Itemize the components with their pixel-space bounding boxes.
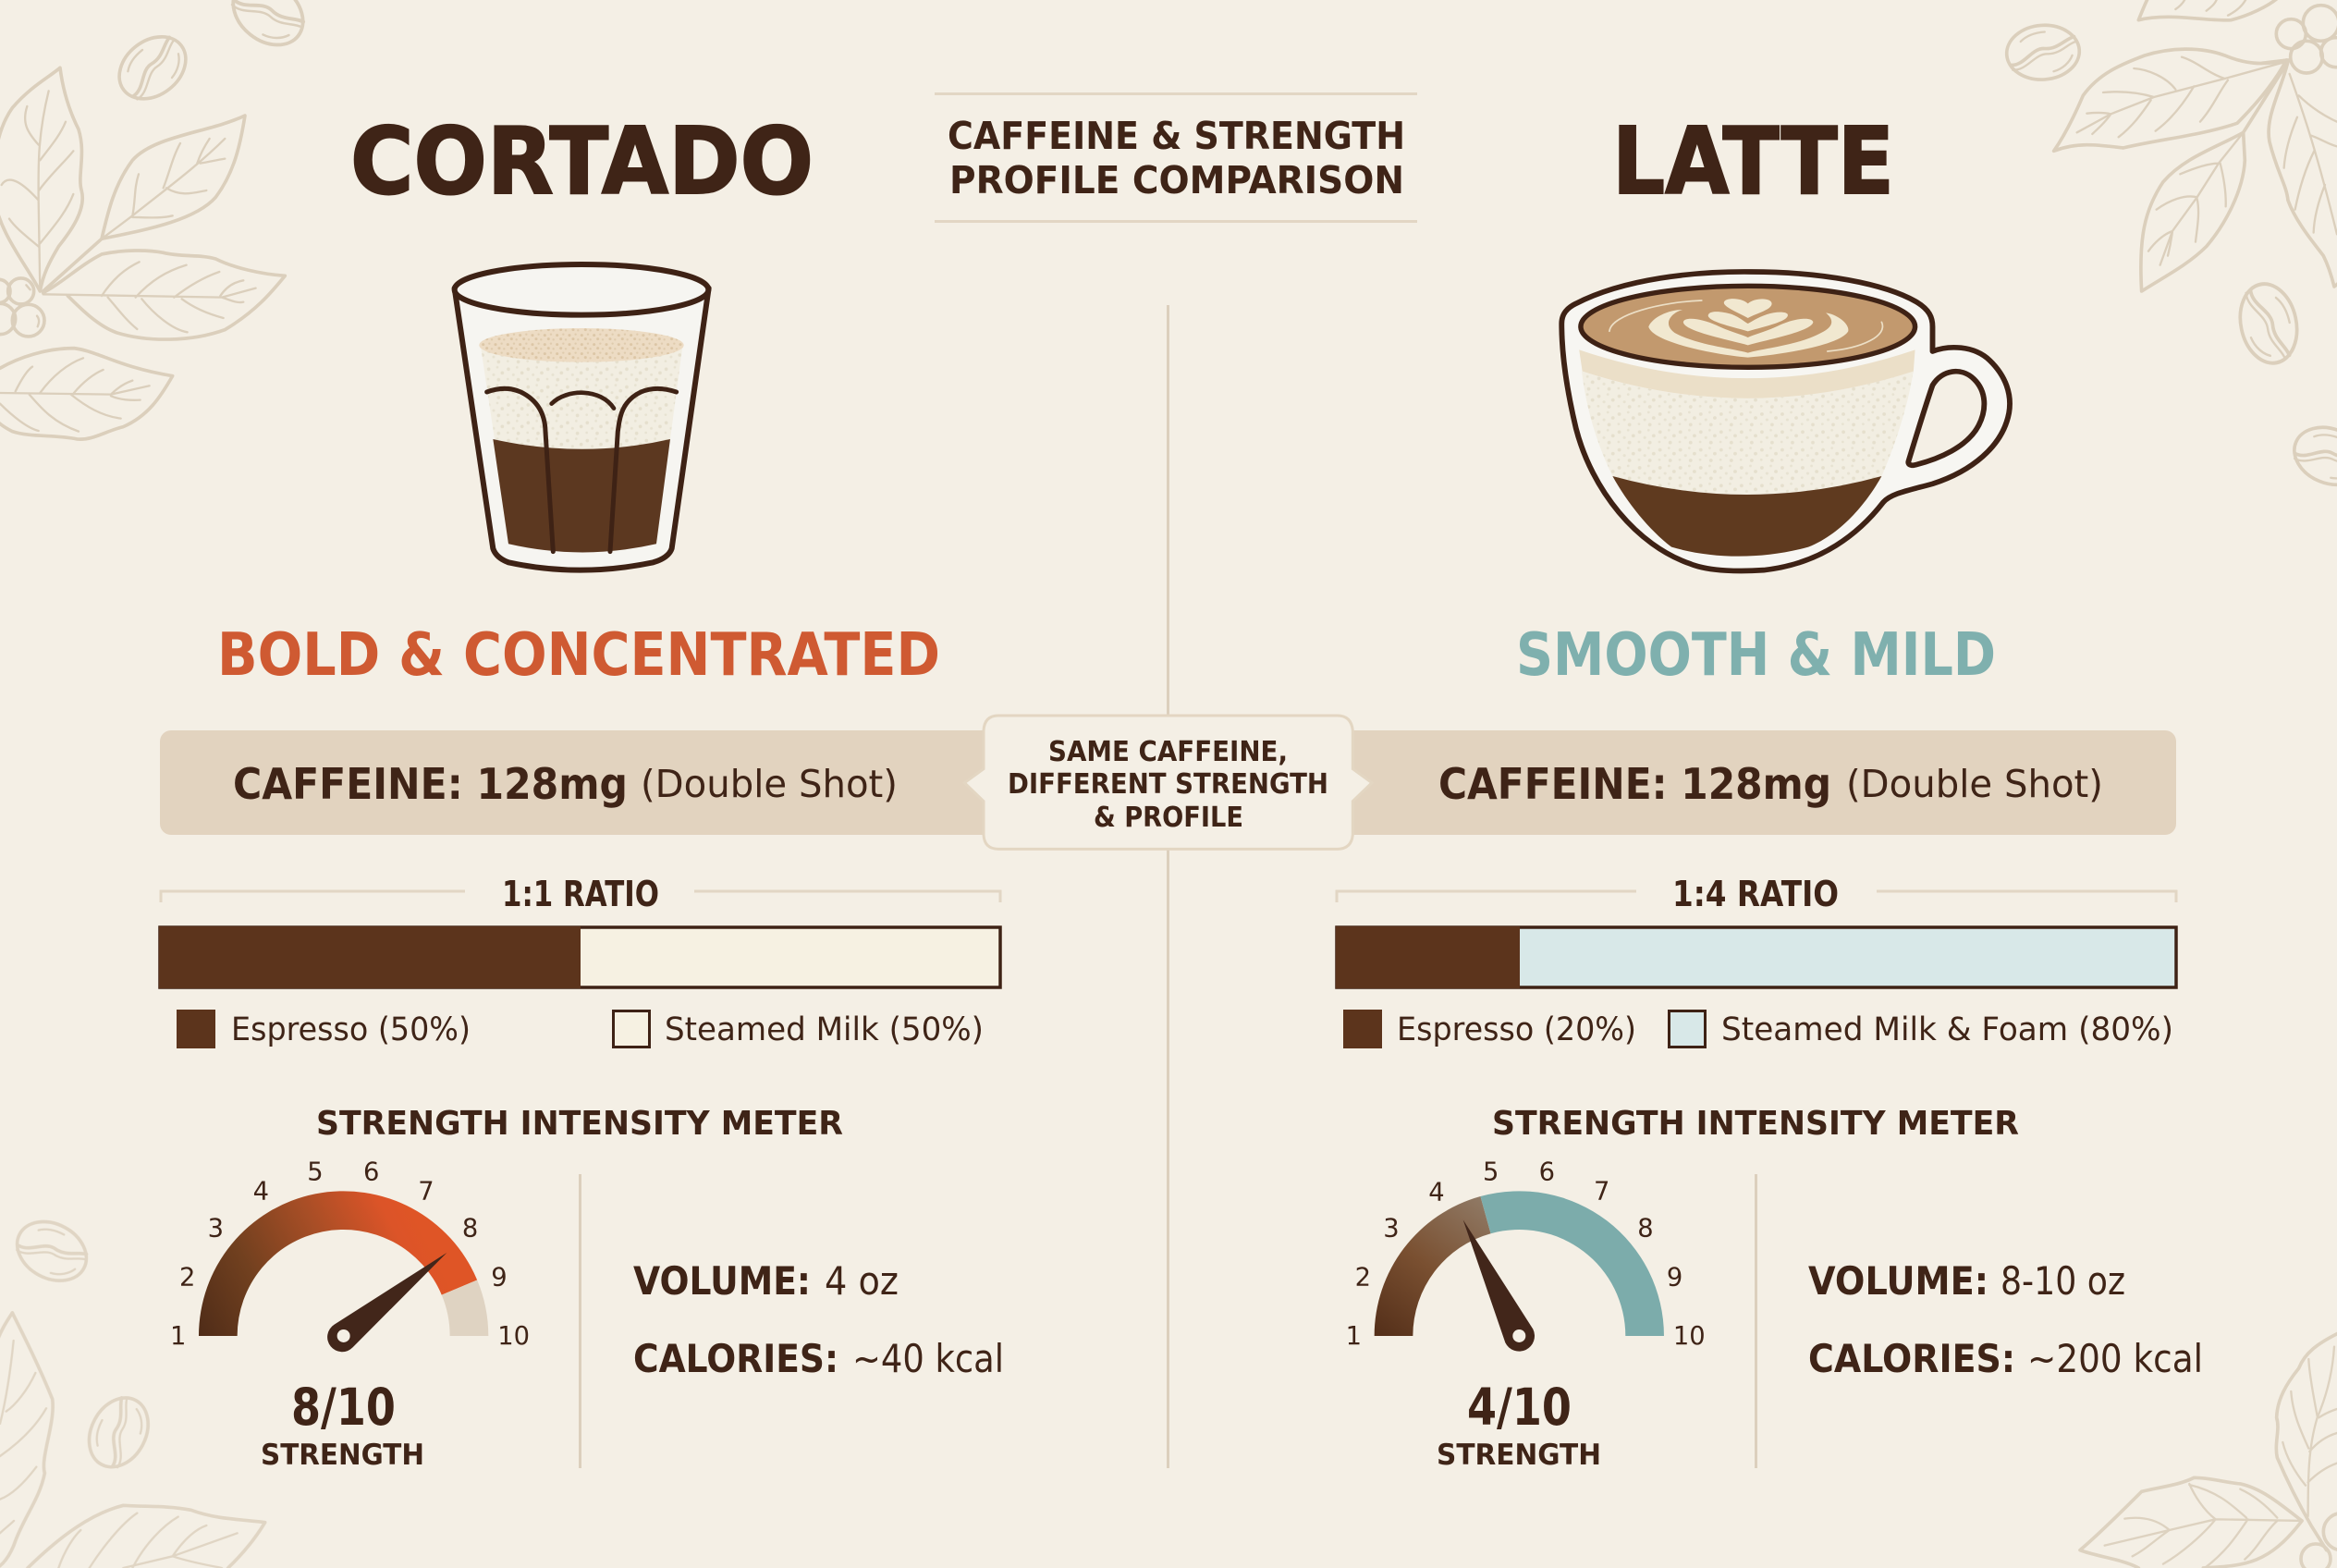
center callout	[964, 716, 1372, 849]
center heading	[935, 92, 1417, 223]
espresso layer	[1612, 476, 1881, 557]
stat: calories: ~200 kcal	[2027, 1336, 2203, 1381]
center divider line	[1167, 305, 1169, 1468]
center heading: CAFFEINE & STRENGTH	[948, 114, 1405, 158]
gauge scale numbers: 9	[491, 1264, 508, 1292]
decorative botanicals: bottom left	[0, 1210, 265, 1568]
panel: latte	[1336, 107, 2203, 1472]
handle opening	[1908, 372, 1984, 465]
legend: steamed milk 50%: Steamed Milk (50%)	[665, 1011, 984, 1048]
gauge scale numbers: 1	[1346, 1322, 1362, 1351]
legend: steamed milk and foam 80%: Steamed Milk & Foam (80%)	[1721, 1011, 2173, 1048]
ratio bar: 1:1	[159, 926, 1000, 988]
ratio heading: 1:4: 1:4 RATIO	[1672, 874, 1839, 914]
gauge needle	[327, 1253, 447, 1352]
legend: espresso 20%: Espresso (20%)	[1397, 1011, 1636, 1048]
gauge needle	[1463, 1219, 1535, 1352]
milk layer	[1582, 372, 1914, 495]
gauge arc remainder	[1480, 1191, 1664, 1336]
gauge score: 4/10: STRENGTH	[1437, 1439, 1601, 1472]
gauge scale numbers: 5	[1483, 1158, 1499, 1187]
gauge scale numbers: 6	[363, 1158, 379, 1187]
latte art	[1648, 299, 1848, 358]
ratio heading: 1:4	[1337, 874, 2176, 914]
stat: calories: CALORIES:	[633, 1336, 838, 1381]
gauge score: 4/10	[1437, 1378, 1601, 1472]
caffeine stat: latte	[1438, 759, 2103, 809]
center heading: PROFILE COMPARISON	[949, 158, 1404, 202]
gauge scale numbers: 8	[1637, 1214, 1654, 1243]
legend: espresso 50%: Espresso (50%)	[231, 1011, 471, 1048]
foam layer	[479, 328, 684, 362]
icon: latte cup	[1561, 272, 2010, 571]
gauge scale numbers: 7	[1594, 1177, 1609, 1206]
stat: calories: CALORIES:	[1808, 1336, 2015, 1381]
stat: calories	[1808, 1336, 2203, 1381]
gauge scale numbers: 9	[1667, 1264, 1682, 1292]
gauge scale numbers: 3	[1383, 1214, 1400, 1243]
gauge scale numbers: 1	[170, 1322, 186, 1351]
decorative botanicals: top left	[0, 0, 315, 439]
milk layer	[481, 347, 682, 452]
gauge scale numbers: 2	[179, 1264, 195, 1292]
tagline: latte: SMOOTH & MILD	[1516, 621, 1996, 690]
panel: cortado	[159, 107, 1004, 1472]
gauge scale numbers: 8	[462, 1214, 478, 1243]
stat: calories	[633, 1336, 1004, 1381]
icon: cortado glass	[455, 264, 709, 570]
gauge: latte 4/10	[1346, 1158, 1706, 1352]
caffeine stat: latte: (Double Shot)	[1846, 762, 2103, 806]
ratio bar: 1:4	[1336, 926, 2176, 988]
latte art swirls	[1609, 300, 1882, 351]
stat: volume: VOLUME:	[633, 1258, 811, 1304]
gauge arc remainder	[442, 1280, 488, 1336]
gauge scale numbers: 10	[497, 1322, 530, 1351]
espresso layer	[493, 439, 670, 552]
stats divider	[579, 1174, 581, 1468]
caffeine stat: cortado	[233, 759, 898, 809]
gauge scale numbers: 4	[1428, 1178, 1445, 1207]
stat: calories: ~40 kcal	[852, 1336, 1004, 1381]
meter heading: latte: STRENGTH INTENSITY METER	[1492, 1105, 2019, 1143]
center callout: & PROFILE	[1094, 802, 1243, 834]
ratio heading: 1:1: 1:1 RATIO	[502, 874, 659, 914]
decorative botanicals: bottom right	[2080, 1333, 2337, 1568]
meter heading: cortado: STRENGTH INTENSITY METER	[316, 1105, 843, 1143]
gauge scale numbers: 6	[1539, 1158, 1555, 1187]
decorative botanicals: top right	[2005, 0, 2337, 495]
gauge scale numbers: 7	[418, 1177, 434, 1206]
coffee surface	[1581, 286, 1915, 367]
gauge scale numbers: 2	[1355, 1264, 1371, 1292]
center column	[160, 92, 2176, 1468]
gauge score: 8/10: STRENGTH	[261, 1439, 424, 1472]
stat: volume: 4 oz	[825, 1258, 899, 1304]
glass rim	[455, 264, 708, 315]
center callout: SAME CAFFEINE,	[1048, 736, 1288, 768]
gauge scale numbers	[170, 1158, 530, 1351]
caffeine band	[160, 730, 2176, 835]
caffeine stat: cortado: (Double Shot)	[641, 762, 898, 806]
caffeine stat: cortado: CAFFEINE: 128mg	[233, 759, 628, 809]
gauge score: 8/10: 8/10	[291, 1378, 396, 1437]
gauge scale numbers: 5	[307, 1158, 324, 1187]
title: latte: LATTE	[1612, 107, 1894, 215]
stat: volume	[1808, 1258, 2125, 1304]
stat: volume: 8-10 oz	[2001, 1258, 2125, 1304]
title: cortado: CORTADO	[350, 107, 814, 215]
gauge score: 4/10: 4/10	[1467, 1378, 1572, 1437]
foam band	[1579, 349, 1915, 398]
gauge scale numbers	[1346, 1158, 1706, 1351]
glass facets	[487, 388, 677, 552]
gauge score: 8/10	[261, 1378, 424, 1472]
stats divider	[1755, 1174, 1757, 1468]
caffeine stat: latte: CAFFEINE: 128mg	[1438, 759, 1831, 809]
gauge: cortado 8/10	[170, 1158, 530, 1352]
tagline: cortado: BOLD & CONCENTRATED	[217, 621, 940, 690]
gauge scale numbers: 4	[253, 1177, 269, 1206]
center callout: DIFFERENT STRENGTH	[1008, 768, 1328, 801]
gauge scale numbers: 3	[208, 1214, 224, 1243]
gauge arc filled	[199, 1191, 477, 1336]
ratio heading: 1:1	[161, 874, 1000, 914]
gauge arc filled	[1375, 1196, 1491, 1336]
glass body	[455, 288, 709, 570]
cup body and handle	[1561, 272, 2010, 571]
gauge scale numbers: 10	[1673, 1322, 1706, 1351]
stat: volume: VOLUME:	[1808, 1258, 1988, 1304]
